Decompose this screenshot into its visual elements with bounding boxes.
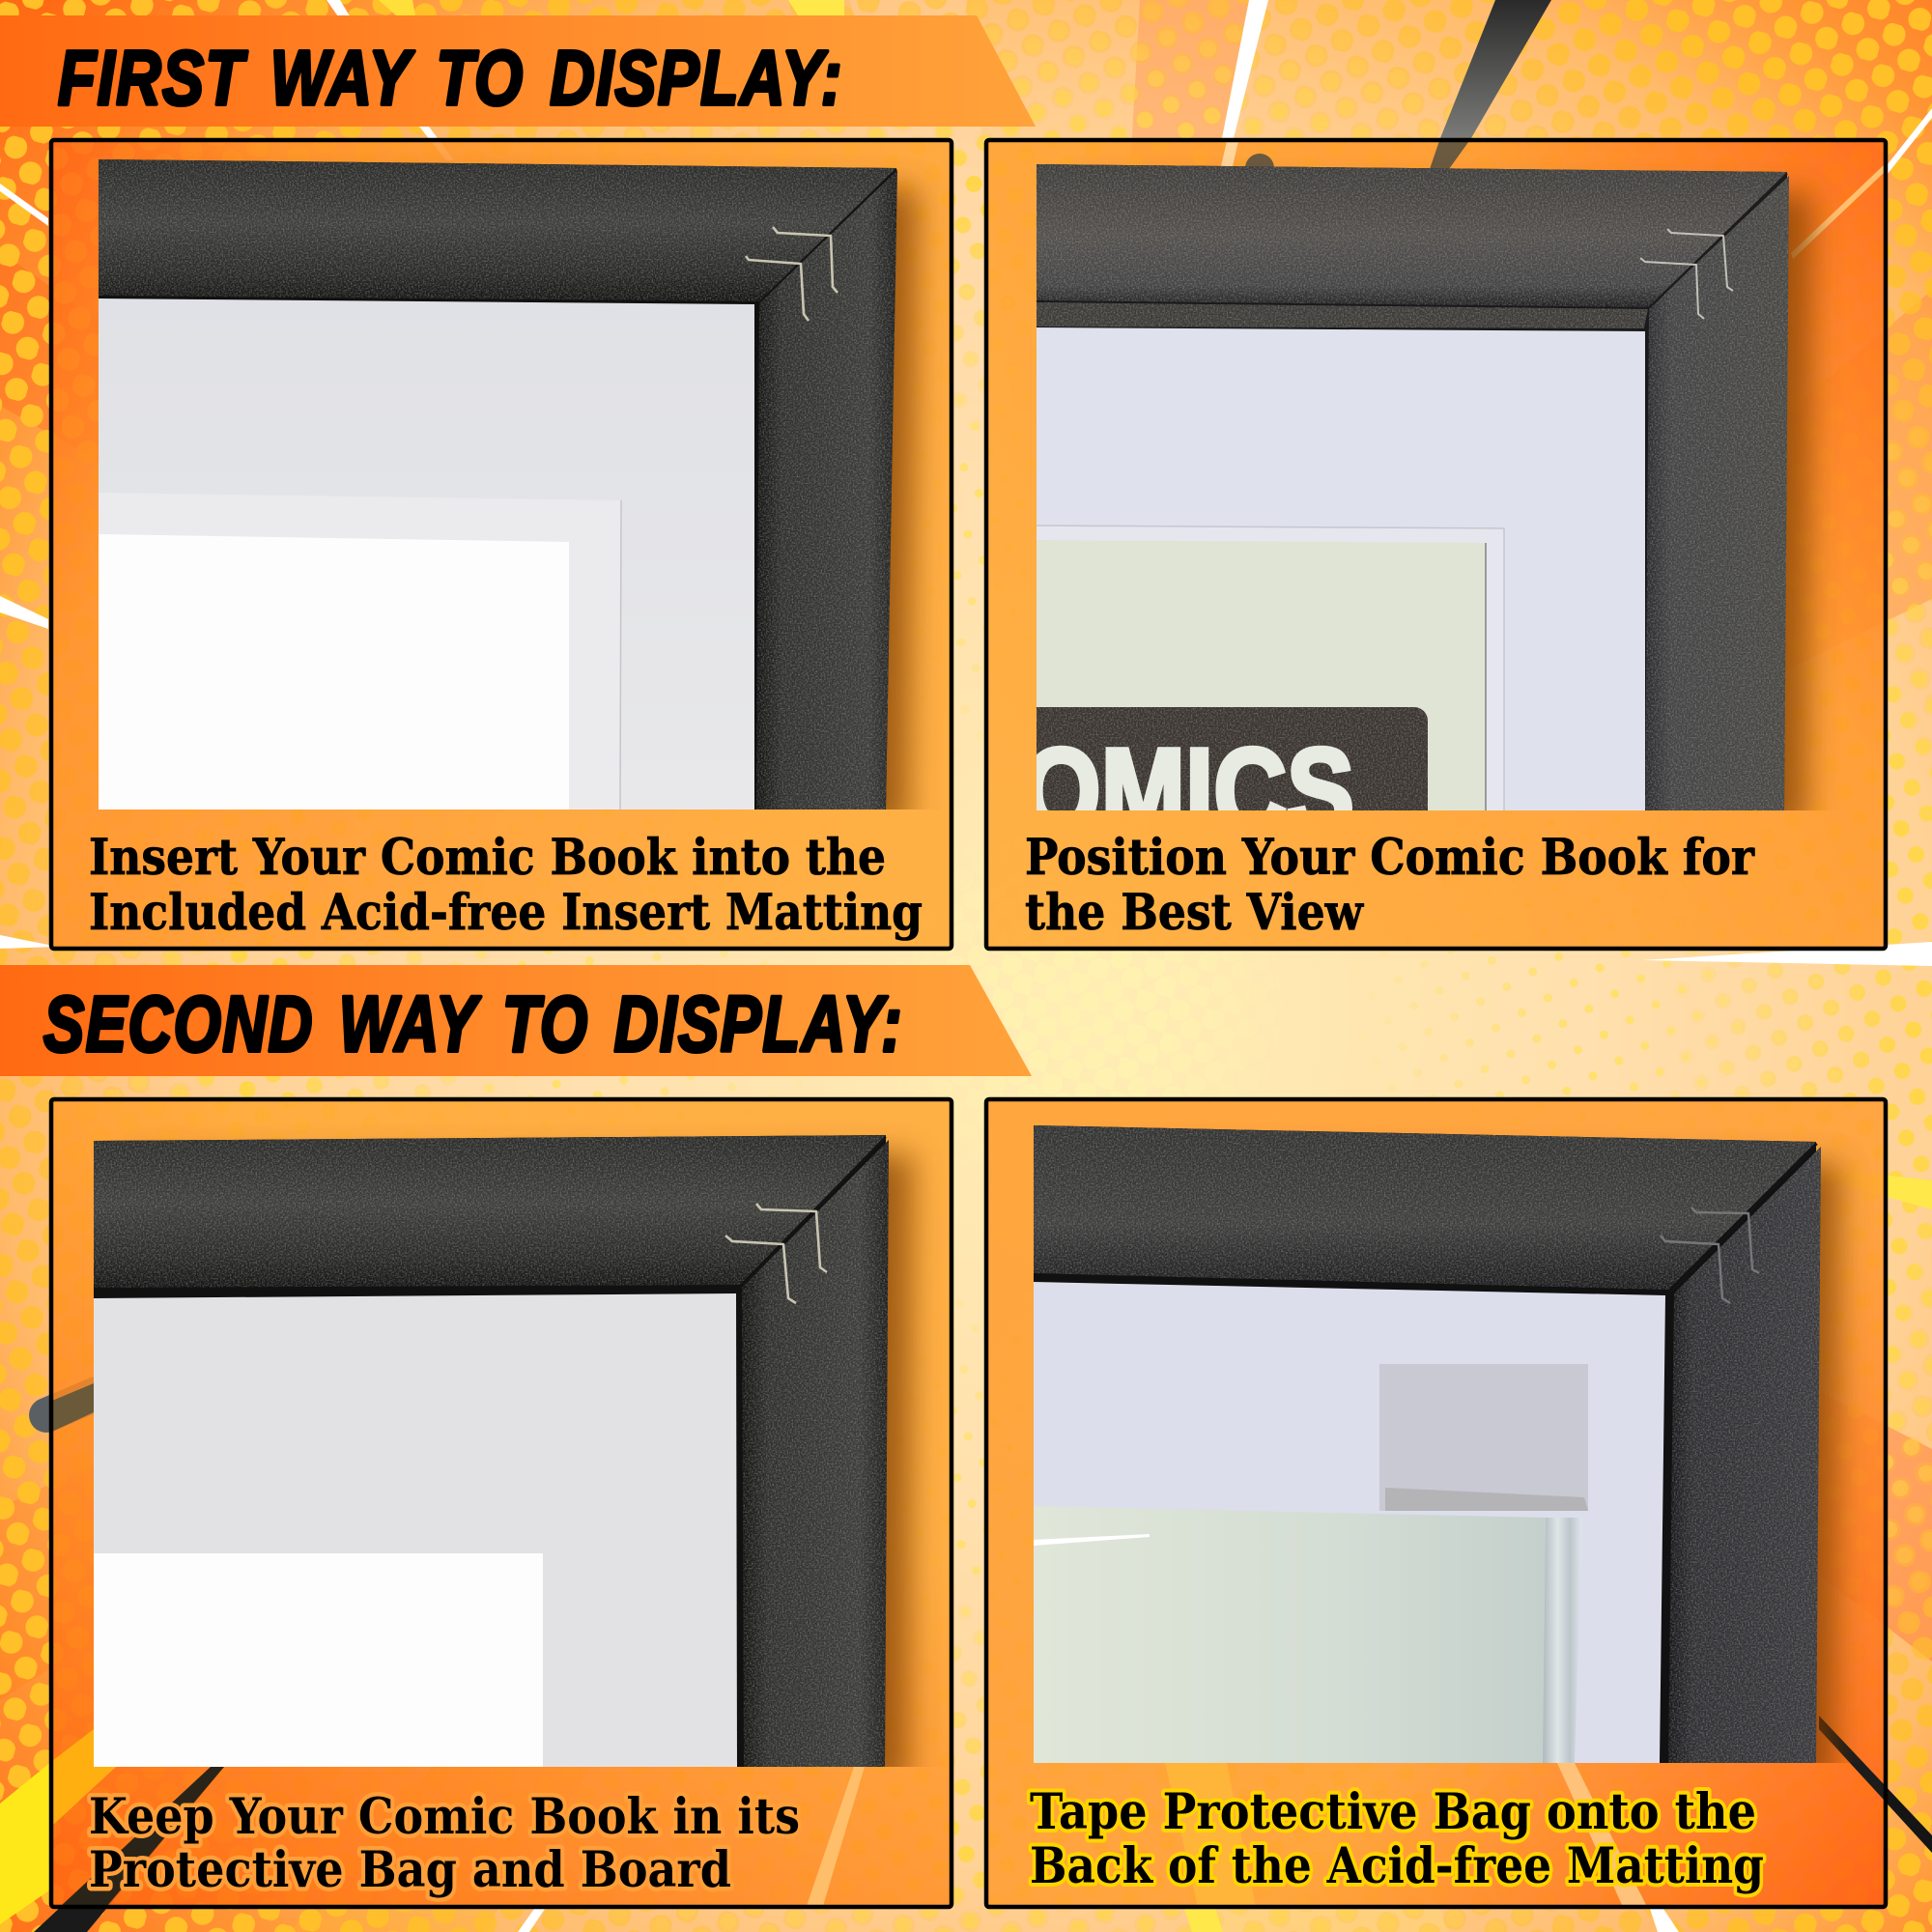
panel background [51, 1099, 952, 1907]
comic in protective bag [1541, 1518, 1582, 1763]
banner: first way to display [0, 15, 1036, 127]
grey ray behind panel two [1440, 0, 1551, 138]
caption [1030, 1783, 1764, 1895]
panel: second way, step two [986, 1099, 1932, 1907]
panel: first way, step one [51, 140, 952, 949]
panel: second way, step one [34, 1099, 952, 1932]
caption: Back of the Acid-free Matting [1030, 1837, 1764, 1895]
heading: first way: FIRST WAY TO DISPLAY: [58, 35, 843, 121]
photo: taped bag on matting [1034, 1125, 1821, 1763]
panel background [986, 1099, 1886, 1907]
banner: second way to display [0, 965, 1032, 1076]
frame shadow [1072, 1154, 1840, 1787]
black ray, right [1819, 1716, 1932, 1853]
staples [725, 1204, 827, 1303]
photo: framed corner with matting [99, 159, 897, 810]
caption [89, 829, 923, 942]
caption: Insert Your Comic Book into the [89, 829, 886, 887]
black ray [34, 1767, 224, 1932]
comic logo: OMICS [1022, 724, 1354, 859]
staples [1640, 229, 1733, 319]
caption: Protective Bag and Board [89, 1841, 731, 1899]
heading: second way: SECOND WAY TO DISPLAY: [43, 980, 903, 1068]
caption [89, 1788, 800, 1899]
photo: framed comic with logo [1022, 164, 1789, 859]
tape on matting [1379, 1364, 1588, 1511]
caption: Included Acid-free Insert Matting [89, 884, 923, 942]
caption: Position Your Comic Book for [1025, 829, 1755, 887]
grey ray stub [46, 1394, 97, 1415]
caption: Keep Your Comic Book in its [89, 1788, 800, 1846]
frame shadow [135, 1154, 913, 1787]
staples [1661, 1208, 1759, 1303]
caption: Tape Protective Bag onto the [1030, 1783, 1756, 1841]
caption [1025, 829, 1755, 942]
comic logo [1037, 707, 1428, 810]
staples [746, 227, 838, 321]
frame shadow [1784, 174, 1833, 810]
caption: the Best View [1025, 884, 1364, 942]
panel: first way, step two [986, 0, 1886, 949]
photo: framed white comic board [94, 1135, 889, 1767]
panel background [986, 140, 1886, 949]
frame shadow [886, 168, 937, 810]
panel background [51, 140, 952, 949]
